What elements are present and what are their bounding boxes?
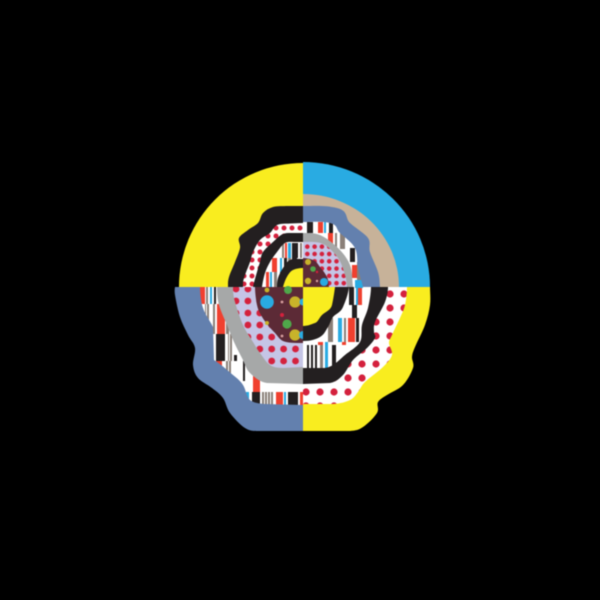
steel-blue wavy outer band xyxy=(175,287,303,431)
centre yellow wedge xyxy=(303,287,335,326)
second black wavy band xyxy=(253,233,303,287)
gray band xyxy=(303,233,353,287)
outer black wavy band xyxy=(303,287,388,384)
yellow quarter disc xyxy=(179,163,303,287)
lavender band with red dots xyxy=(233,287,303,368)
yellow wavy outer band xyxy=(303,287,430,431)
barcode stripe band xyxy=(303,222,363,287)
maroon core with coloured dots xyxy=(255,286,303,343)
inner black wavy band xyxy=(303,287,349,341)
barcode stripe band xyxy=(262,242,303,287)
tan band xyxy=(303,194,399,287)
maroon core with coloured dots xyxy=(303,258,329,287)
panel: bottom-right quadrant xyxy=(303,287,430,431)
barcode stripe band xyxy=(200,287,303,405)
white band with red dots xyxy=(303,287,407,404)
panel: top-left quadrant xyxy=(179,163,303,287)
white band with red dots xyxy=(243,223,303,287)
lavender band with red dots xyxy=(303,242,347,287)
inner black wavy band xyxy=(277,259,303,287)
panel: bottom-left quadrant xyxy=(175,286,303,431)
blue quarter disc xyxy=(303,162,430,287)
panel: top-right quadrant xyxy=(303,162,430,287)
steel-blue wavy band xyxy=(303,206,380,287)
centre yellow wedge xyxy=(283,268,303,287)
outer black wavy band xyxy=(228,206,303,287)
gray band xyxy=(217,287,303,384)
barcode stripe band xyxy=(303,287,371,368)
